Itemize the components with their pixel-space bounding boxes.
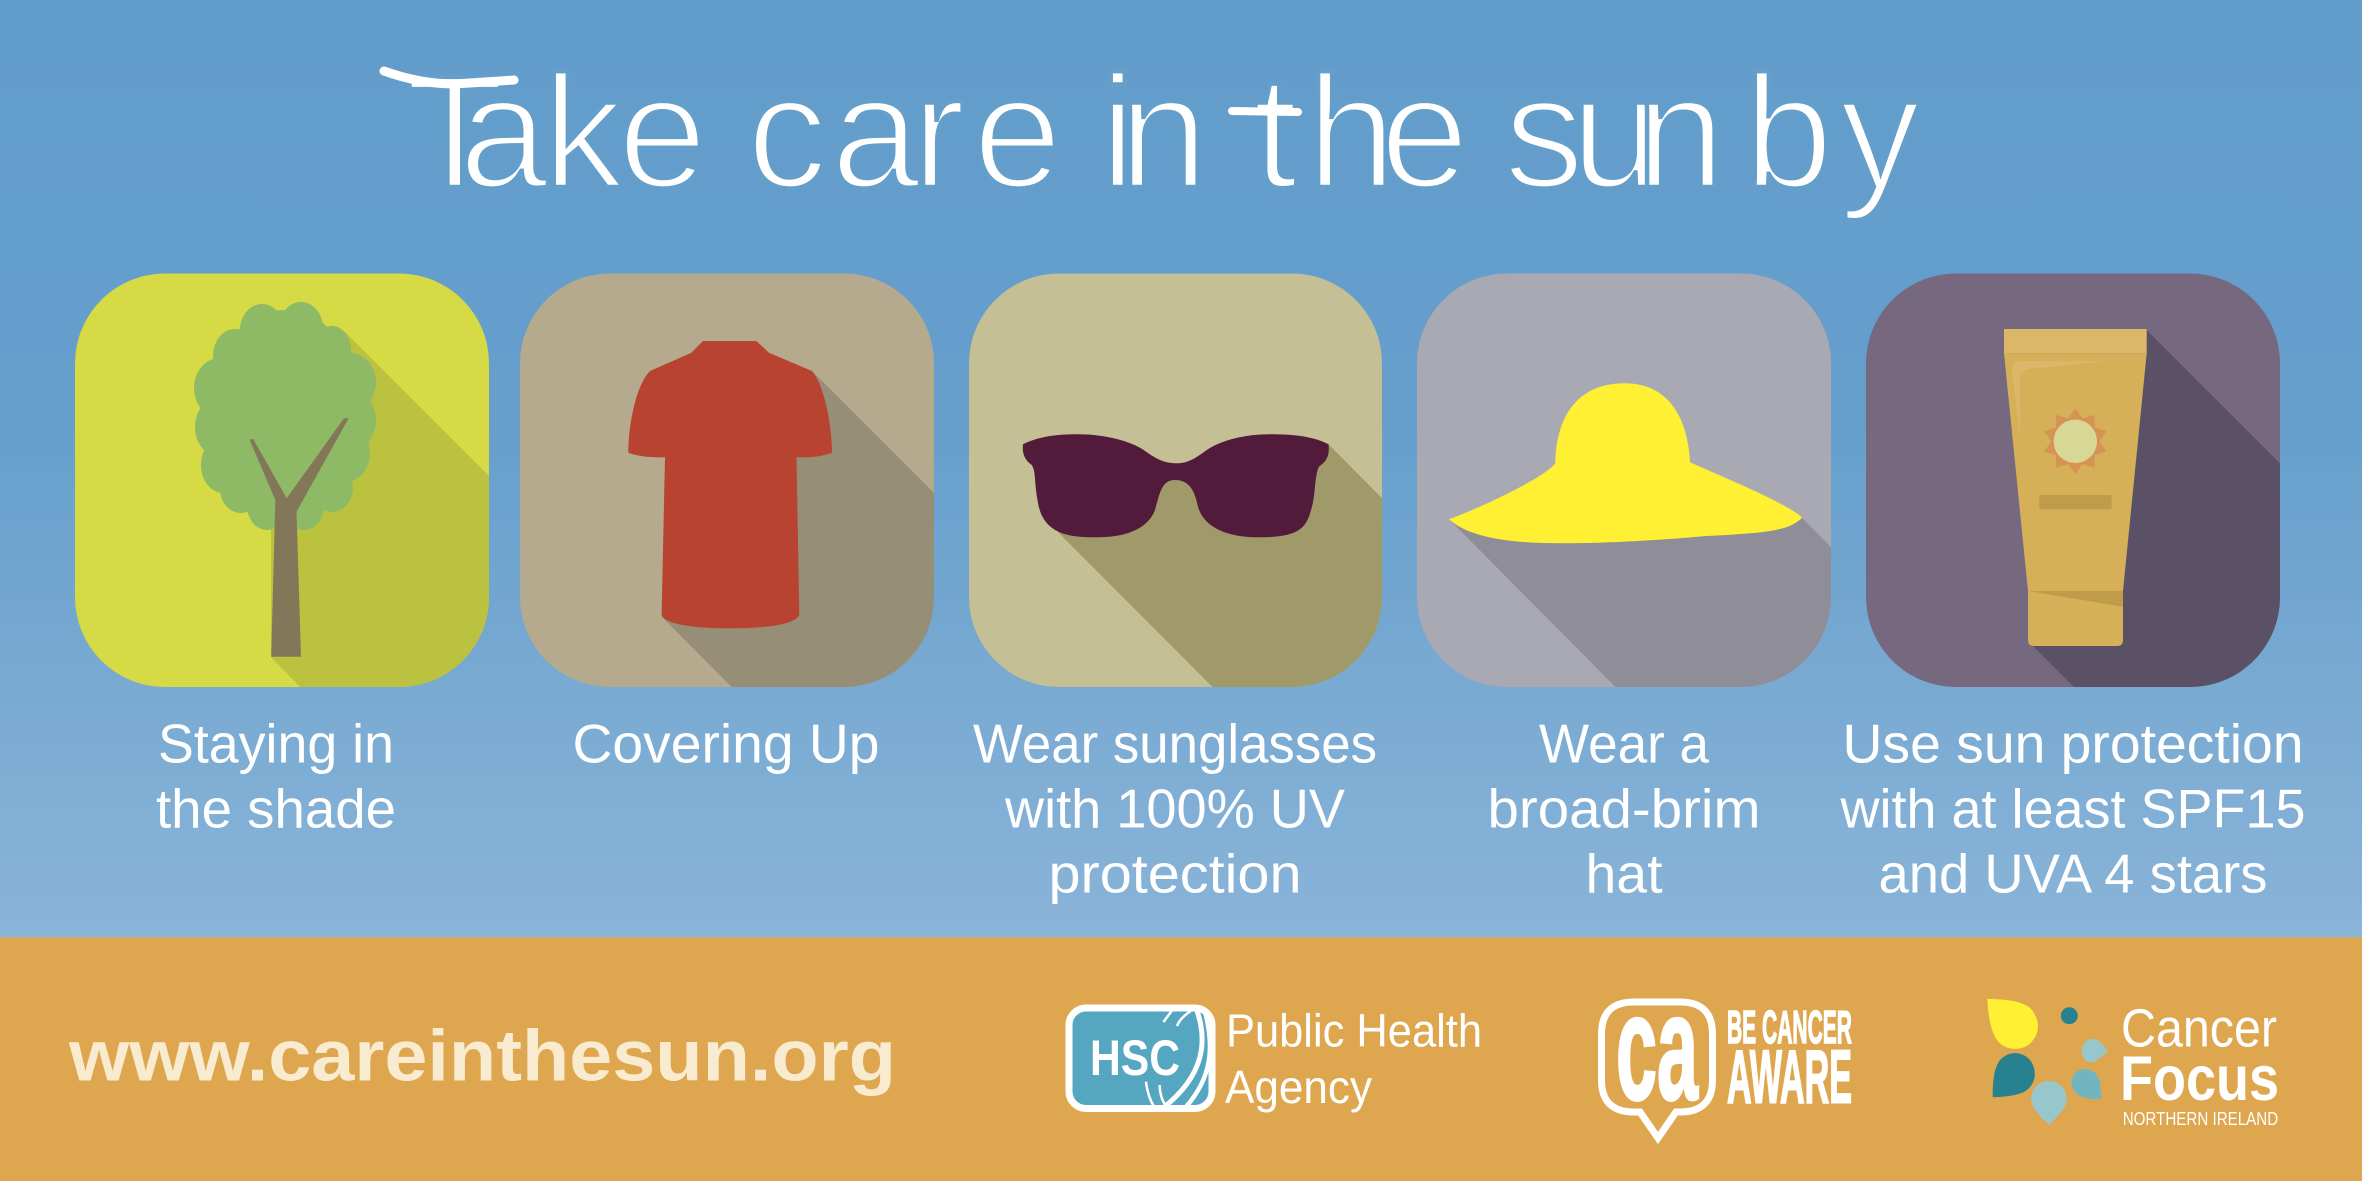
tube highlight: [2012, 361, 2107, 437]
agency name: Public Health: [1226, 1005, 1482, 1057]
card: sunglasses tile: [969, 274, 1382, 687]
panel: wear sunglasses: [969, 274, 1382, 904]
tube cap: [2004, 329, 2147, 353]
agency name: Agency: [1225, 1061, 1372, 1113]
label: use sun protection: [1840, 712, 2306, 904]
icon: shirt: [628, 341, 832, 628]
tree long shadow: [271, 332, 489, 687]
petal: teal: [1993, 1053, 2035, 1097]
label: wear sunglasses: Wear sunglasses: [973, 712, 1377, 774]
label: wear a broad-brim hat: Wear a: [1539, 712, 1709, 774]
label: staying in the shade: the shade: [156, 778, 396, 840]
label: wear sunglasses: protection: [1048, 842, 1302, 904]
tube body: [2004, 353, 2147, 646]
card: shade tile: [75, 274, 489, 687]
card: sunscreen tile: [1866, 274, 2280, 687]
label: covering up: Covering Up: [572, 712, 880, 774]
Cancer: Cancer: [2121, 999, 2277, 1059]
tube long shadow: [2033, 330, 2280, 687]
label: wear sunglasses: [973, 712, 1377, 904]
label: staying in the shade: Staying in: [158, 712, 394, 774]
icon: sunglasses: [1023, 434, 1329, 537]
label: wear a broad-brim hat: broad-brim: [1488, 778, 1760, 840]
HSC badge swooshes: [1146, 1008, 1210, 1108]
agency name: [1225, 1005, 1482, 1113]
text: AWARE: [1727, 1035, 1852, 1119]
icon: tree: [194, 302, 376, 657]
sunglasses long shadow: [1058, 444, 1382, 687]
sun logo rays: [2044, 409, 2106, 474]
text: BE CANCER: [1727, 1001, 1852, 1053]
petal: pale drop: [2031, 1081, 2067, 1125]
tube label bar: [2039, 495, 2112, 509]
website url: www.careinthesun.org: [68, 1017, 896, 1097]
label: use sun protection: and UVA 4 stars: [1878, 842, 2268, 904]
logo: HSC Public Health Agency: [1069, 1005, 1482, 1113]
label: wear a broad-brim hat: [1488, 712, 1760, 904]
label: use sun protection: with at least SPF15: [1840, 778, 2306, 840]
icon: sunscreen tube: [2004, 329, 2147, 646]
title: Take care in the sun by: [406, 42, 1920, 221]
speech bubble outline: [1602, 1002, 1712, 1138]
tube crease: [2028, 591, 2123, 607]
label: staying in the shade: [156, 712, 396, 840]
logo: Be Cancer Aware: [1602, 963, 1852, 1138]
label: use sun protection: Use sun protection: [1842, 712, 2304, 774]
HSC badge text: HSC: [1090, 1030, 1180, 1086]
logo: Cancer Focus Northern Ireland: [1987, 999, 2279, 1129]
card: hat tile: [1417, 274, 1831, 687]
card: covering tile: [520, 274, 934, 687]
panel: covering up: [520, 274, 934, 774]
dot: [2061, 1007, 2078, 1024]
panel: wear a broad-brim hat: [1417, 274, 1831, 904]
HSC badge box: [1069, 1008, 1212, 1108]
tree foliage: [194, 302, 376, 530]
hat long shadow: [1449, 500, 1831, 687]
shirt long shadow: [662, 371, 934, 687]
label: wear sunglasses: with 100% UV: [1004, 778, 1345, 840]
icon: hat: [1449, 383, 1802, 543]
logo: Be Cancer Aware: ca: [1616, 963, 1699, 1131]
tree trunk: [249, 418, 349, 657]
panel: use sun protection: [1840, 274, 2306, 904]
petal: pale side drop: [2082, 1039, 2108, 1062]
petal: yellow: [1987, 999, 2038, 1049]
sun logo disc: [2054, 420, 2097, 463]
Northern Ireland: NORTHERN IRELAND: [2123, 1109, 2278, 1129]
label: wear a broad-brim hat: hat: [1586, 842, 1662, 904]
Focus: Focus: [2120, 1044, 2279, 1114]
petal: mid blue: [2071, 1069, 2101, 1099]
footer band: [0, 937, 2362, 1181]
panel: staying in the shade: [75, 274, 489, 840]
